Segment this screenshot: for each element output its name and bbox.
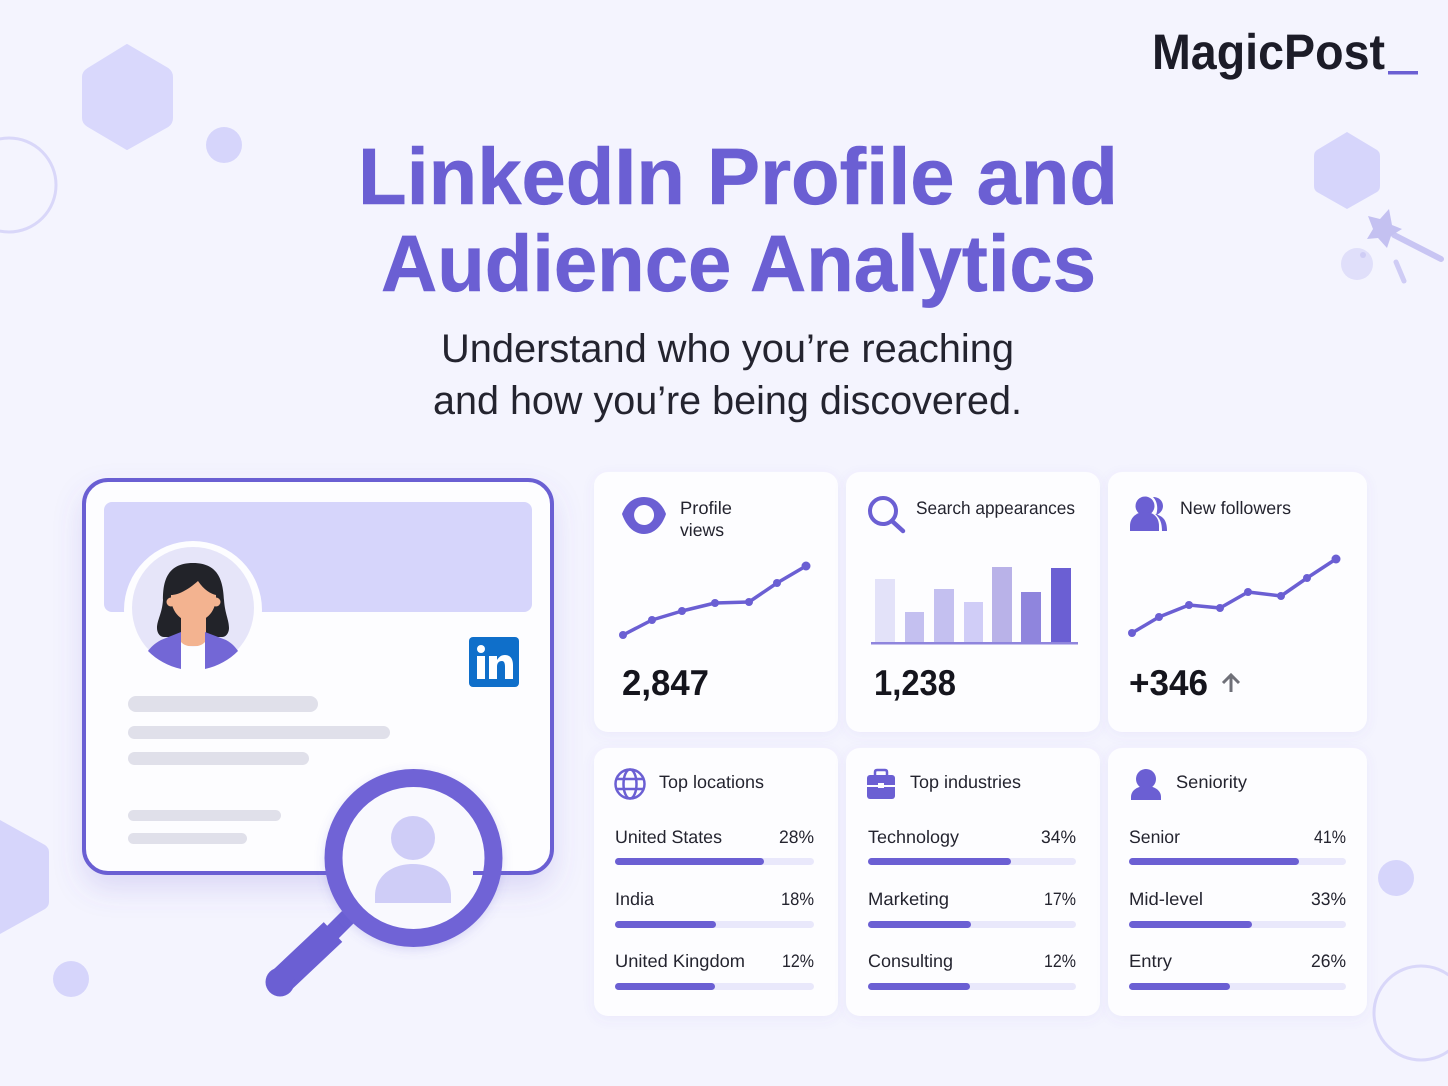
- row: Consulting: Consulting: [868, 951, 953, 971]
- icon: eye: [622, 497, 666, 534]
- row: India: India: [615, 889, 655, 909]
- icon: up arrow: [1223, 675, 1239, 692]
- row: Entry: Entry: [1129, 951, 1172, 971]
- row: Mid-level: Mid-level: [1129, 889, 1203, 909]
- row: United States: United States: [615, 827, 722, 847]
- row: Entry: [1129, 951, 1346, 990]
- label: Top industries: [910, 772, 1021, 792]
- subtitle: and how you’re being discovered.: [433, 379, 1022, 423]
- row: Senior: [1129, 827, 1346, 865]
- row: Mid-level: [1129, 889, 1346, 928]
- panel: seniority: [1108, 748, 1367, 1016]
- row: Marketing: [868, 889, 1076, 928]
- icon: search: [870, 498, 903, 531]
- row: Marketing: 17%: [1044, 889, 1076, 909]
- row: Consulting: 12%: [1044, 951, 1076, 971]
- icon: briefcase: [867, 770, 895, 799]
- label: Top locations: [659, 772, 764, 792]
- row: Senior: 41%: [1314, 827, 1346, 847]
- icon: person: [1131, 769, 1161, 800]
- label: Seniority: [1176, 772, 1247, 792]
- row: Technology: [868, 827, 1076, 865]
- icon: globe: [616, 770, 644, 798]
- row: United Kingdom: [615, 951, 814, 990]
- value: 2,847: [622, 662, 709, 703]
- icon: magnifying glass: [266, 778, 494, 996]
- row: United States: [615, 827, 814, 865]
- icon: LinkedIn badge: [469, 637, 519, 687]
- subtitle: Understand who you’re reaching: [441, 327, 1014, 371]
- panel: new followers: [1108, 472, 1367, 732]
- row: Technology: 34%: [1041, 827, 1076, 847]
- panel: profile views: [594, 472, 838, 732]
- row: India: [615, 889, 814, 928]
- row: United Kingdom: 12%: [782, 951, 814, 971]
- row: Consulting: [868, 951, 1076, 990]
- label: views: [680, 520, 724, 540]
- subtitle: [433, 327, 1022, 423]
- label: Profile: [680, 498, 732, 518]
- title: LinkedIn Profile and: [358, 132, 1118, 221]
- row: United States: 28%: [779, 827, 814, 847]
- row: Marketing: Marketing: [868, 889, 949, 909]
- row: India: 18%: [781, 889, 814, 909]
- row: Senior: Senior: [1129, 827, 1180, 847]
- title: Audience Analytics: [381, 219, 1096, 308]
- line chart: new followers: [1128, 554, 1340, 637]
- avatar: [124, 541, 262, 679]
- profile text placeholders: [128, 696, 390, 844]
- label: [680, 498, 732, 540]
- label: Search appearances: [916, 498, 1075, 518]
- panel: top industries: [846, 748, 1100, 1016]
- line chart: profile views: [619, 562, 810, 639]
- value: 1,238: [874, 662, 956, 703]
- icon: users: [1130, 496, 1167, 531]
- panel: top locations: [594, 748, 838, 1016]
- profile banner: [104, 502, 532, 612]
- label: New followers: [1180, 498, 1291, 518]
- panel: LinkedIn profile card: [84, 480, 552, 873]
- bar chart: search appearances: [871, 567, 1078, 644]
- row: Entry: 26%: [1311, 951, 1346, 971]
- logo: MagicPost: MagicPost: [1152, 24, 1385, 80]
- row: Mid-level: 33%: [1311, 889, 1346, 909]
- panel: search appearances: [846, 472, 1100, 732]
- title: [358, 132, 1118, 308]
- value: +346: [1129, 662, 1208, 703]
- row: Technology: Technology: [868, 827, 959, 847]
- row: United Kingdom: United Kingdom: [615, 951, 745, 971]
